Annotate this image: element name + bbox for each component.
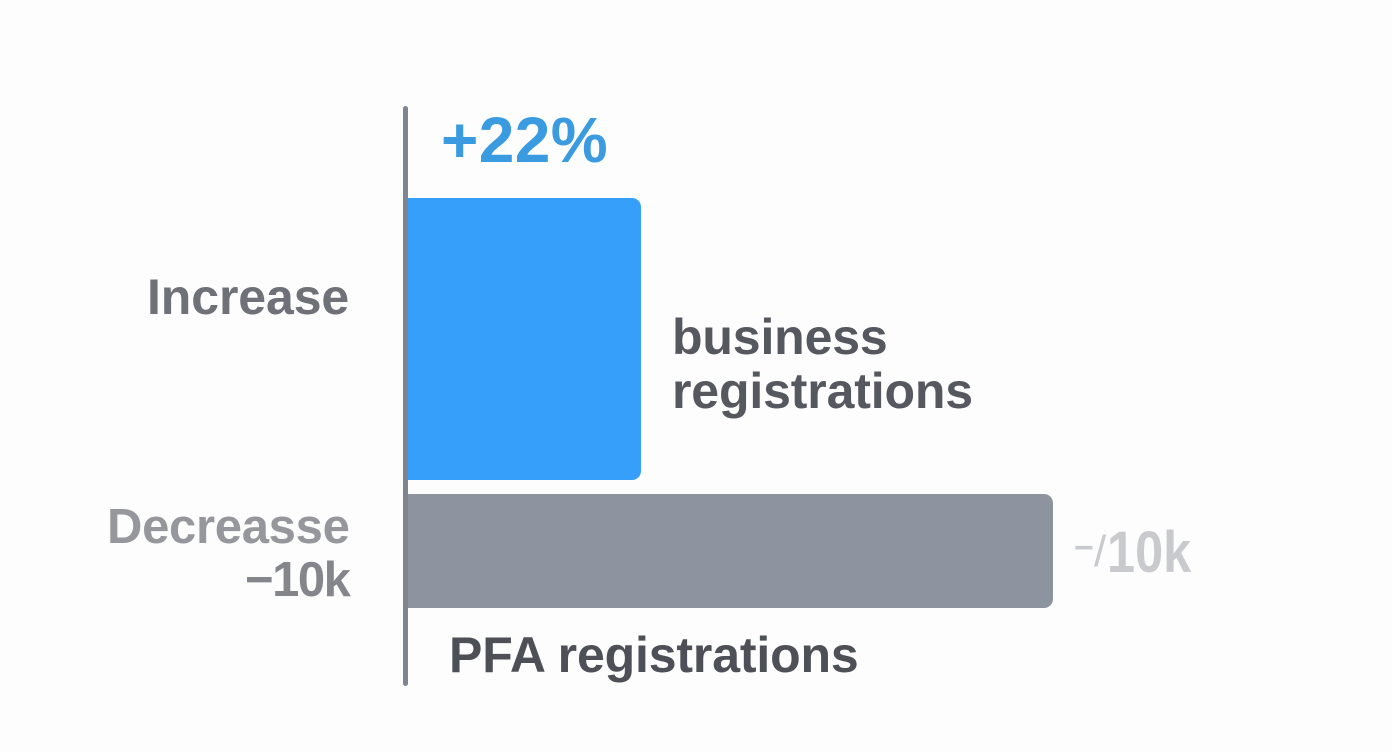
bar: business registrations	[408, 198, 641, 480]
bar: PFA registrations	[408, 494, 1053, 608]
label: Increase: Increase	[147, 269, 349, 325]
value label: -10k right: −	[1074, 529, 1094, 567]
label: -10k left: −10k	[245, 553, 349, 607]
label: business registrations: registrations	[672, 363, 973, 419]
value label: -10k right: 10k	[1107, 520, 1191, 585]
value label: +22%: +22%	[441, 104, 608, 176]
value label: -10k right: /	[1094, 527, 1106, 576]
label: business registrations: business	[672, 309, 888, 365]
label: Decrease: Decreasse	[107, 500, 350, 554]
label: PFA registrations: PFA registrations	[449, 627, 859, 683]
label: business registrations	[672, 309, 973, 419]
axis line	[403, 106, 408, 686]
